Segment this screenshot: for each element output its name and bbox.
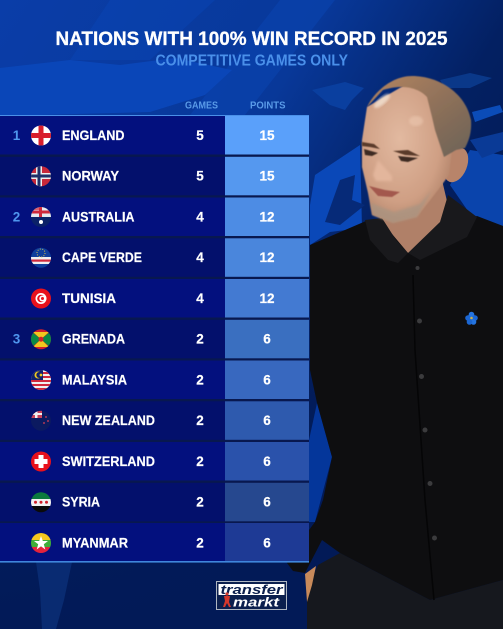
row: Syria: 2 xyxy=(196,495,204,510)
row: Grenada: GRENADA xyxy=(62,332,125,347)
row: Cape Verde xyxy=(0,238,309,277)
flag: Grenada xyxy=(31,329,51,350)
row: Australia: 2 xyxy=(13,210,20,224)
row: Tunisia: 12 xyxy=(259,291,275,306)
row: New Zealand: 6 xyxy=(263,413,271,428)
row: England: ENGLAND xyxy=(62,128,125,143)
icon: red footballer xyxy=(223,592,231,607)
row: Myanmar: MYANMAR xyxy=(62,536,128,550)
row: Myanmar: 2 xyxy=(196,536,204,550)
mouth xyxy=(369,186,400,197)
placket line xyxy=(413,275,434,600)
title: NATIONS WITH 100% WIN RECORD IN 2025 xyxy=(56,28,448,50)
flag: England xyxy=(31,125,51,146)
row: Malaysia: MALAYSIA xyxy=(62,372,127,388)
face xyxy=(362,82,452,223)
row: Switzerland: SWITZERLAND xyxy=(62,454,155,469)
flag: New Zealand xyxy=(31,410,51,431)
hair xyxy=(367,76,471,157)
flag: Tunisia xyxy=(31,288,51,309)
flag: Australia xyxy=(31,207,51,228)
row: Australia: AUSTRALIA xyxy=(62,210,135,224)
row: New Zealand xyxy=(0,401,309,440)
row: Myanmar: 6 xyxy=(263,536,271,550)
row: Syria: 6 xyxy=(263,495,271,510)
row: Tunisia: 4 xyxy=(196,291,204,306)
row: Norway: NORWAY xyxy=(62,169,119,184)
flag: Malaysia xyxy=(31,370,51,391)
trousers xyxy=(307,553,503,629)
flag: Switzerland xyxy=(31,451,51,472)
shirt buttons xyxy=(416,266,437,540)
row: Cape Verde: CAPE VERDE xyxy=(62,250,142,265)
collar xyxy=(365,195,477,263)
subtitle: COMPETITIVE GAMES ONLY xyxy=(156,52,349,70)
row: England: 15 xyxy=(259,128,275,143)
flag: Norway xyxy=(31,166,51,187)
table xyxy=(0,115,309,563)
row: Cape Verde: 12 xyxy=(259,250,275,265)
eyes and brows xyxy=(362,142,420,156)
row: Grenada: 3 xyxy=(13,332,21,347)
ear xyxy=(439,144,473,186)
column header: games: GAMES xyxy=(185,100,218,112)
row: New Zealand: 2 xyxy=(196,413,204,428)
row: Cape Verde: 4 xyxy=(196,250,204,265)
row: Syria: SYRIA xyxy=(62,495,100,510)
row: Australia: 12 xyxy=(259,210,275,224)
flag: Syria xyxy=(31,492,51,513)
row: Switzerland xyxy=(0,442,309,480)
hand xyxy=(305,566,316,602)
row: Malaysia: 2 xyxy=(196,372,204,388)
logo: transfermarkt xyxy=(216,582,286,610)
row: Tunisia: TUNISIA xyxy=(62,291,116,306)
row: Norway xyxy=(0,157,309,195)
row: Norway: 5 xyxy=(196,169,204,184)
row: New Zealand: NEW ZEALAND xyxy=(62,413,155,428)
nose xyxy=(373,160,392,181)
row: England: 1 xyxy=(13,128,21,143)
row: Myanmar xyxy=(0,523,309,561)
row: Malaysia: 6 xyxy=(263,372,271,388)
row: Switzerland: 2 xyxy=(196,454,204,469)
flag: Myanmar xyxy=(31,533,51,554)
row: Malaysia xyxy=(0,360,309,399)
row: Grenada xyxy=(0,320,309,358)
column header: points: POINTS xyxy=(250,100,286,112)
forehead highlight xyxy=(372,92,392,110)
row: Norway: 15 xyxy=(259,169,275,184)
neck xyxy=(374,180,450,253)
logo: transfermarkt: markt xyxy=(233,596,280,610)
person: coach in black polo shirt xyxy=(287,76,503,629)
beard stubble xyxy=(371,190,432,223)
row: Syria xyxy=(0,483,309,521)
row: Australia: 4 xyxy=(196,210,204,224)
shirt and arm xyxy=(287,216,503,600)
pin: blue flower xyxy=(465,312,478,325)
row: England: 5 xyxy=(196,128,204,143)
logo: transfermarkt: transfer xyxy=(220,583,284,597)
row: Grenada: 6 xyxy=(263,332,271,347)
row: Tunisia xyxy=(0,279,309,318)
row: Switzerland: 6 xyxy=(263,454,271,469)
row: Grenada: 2 xyxy=(196,332,204,347)
row: England xyxy=(0,116,309,154)
row: Australia xyxy=(0,198,309,236)
flag: Cape Verde xyxy=(31,247,51,268)
